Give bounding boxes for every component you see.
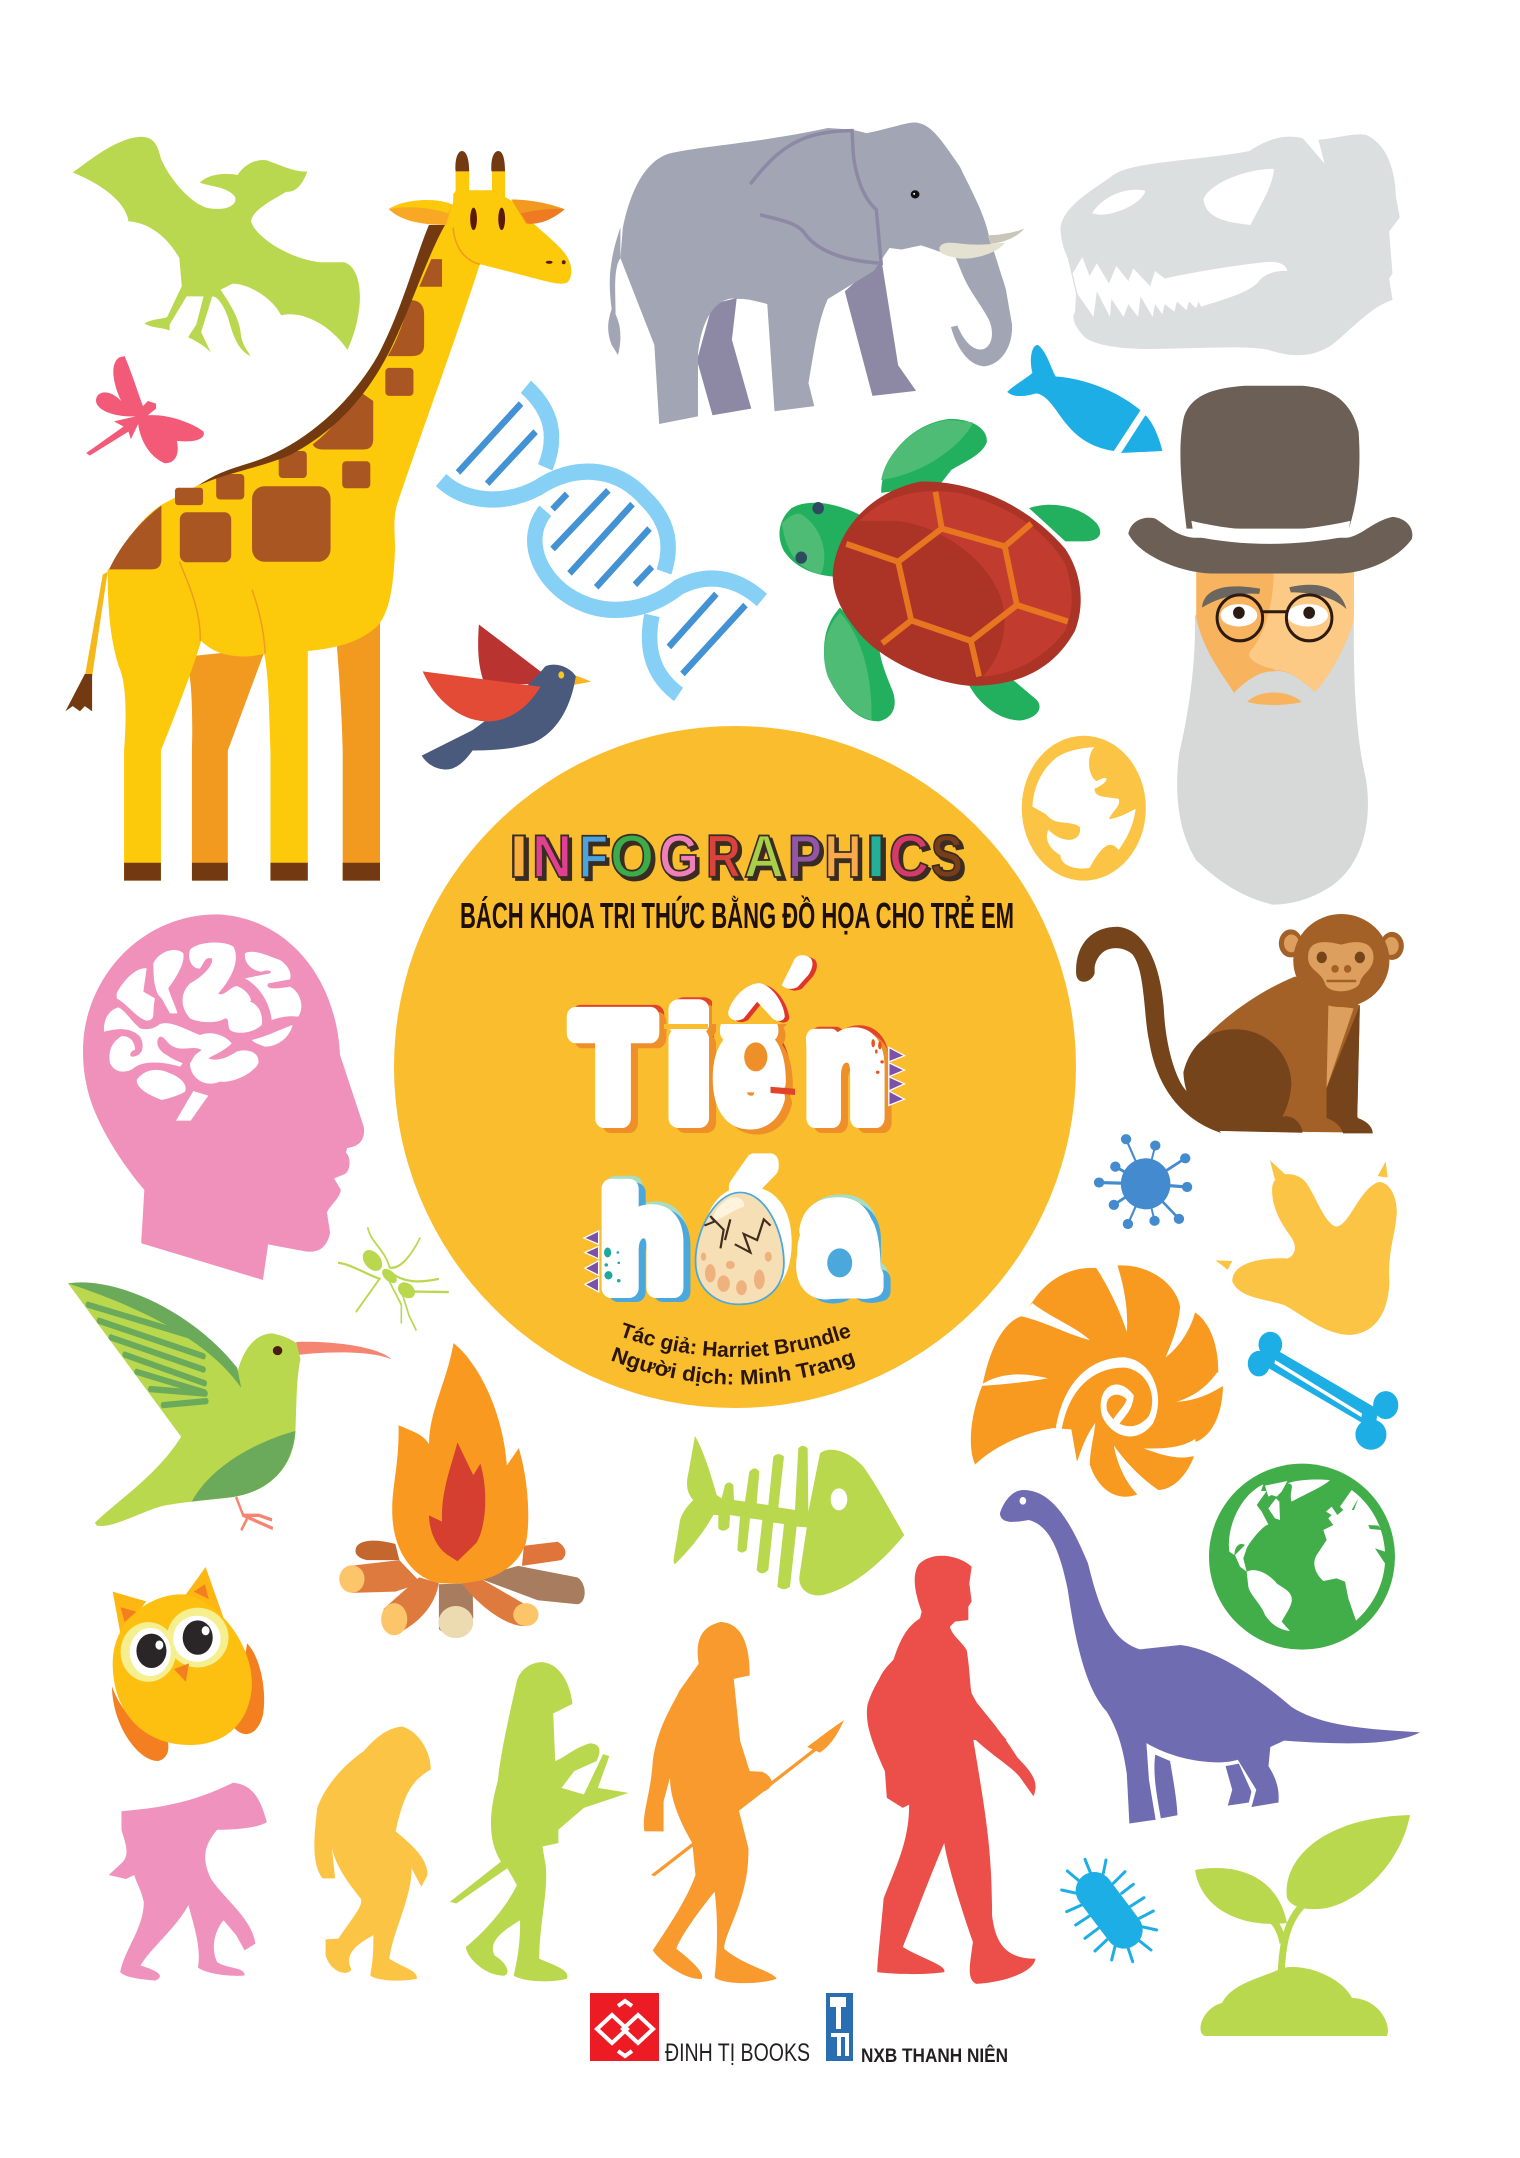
title: Tiến: i [668,982,710,1150]
icon: dinosaur footprint [1216,1160,1397,1335]
heading: INFOGRAPHICS series logo: A [747,826,787,893]
heading: INFOGRAPHICS series logo: I [865,823,887,890]
logo: NXB Thanh Niên: NXB THANH NIÊN [861,2045,1008,2067]
heading: INFOGRAPHICS series logo: C [892,826,932,893]
heading: INFOGRAPHICS series logo: C [889,823,929,890]
heading: INFOGRAPHICS series logo: O [613,826,657,893]
icon: hummingbird [68,1282,391,1530]
icon: brachiosaurus [1000,1490,1420,1824]
title: Tiến: i [675,987,717,1155]
title: hóa: h [609,1169,689,1322]
icon: dinosaur skull [1061,134,1400,355]
icon: blue fish [1007,345,1162,453]
title: Tiến [574,940,891,1155]
heading: INFOGRAPHICS series logo: I [508,823,530,890]
heading: INFOGRAPHICS series logo: O [610,823,654,890]
heading: INFOGRAPHICS series logo [508,823,966,893]
heading: INFOGRAPHICS series logo: F [582,826,611,893]
title: hóa: h [602,1165,682,1318]
icon: fish skeleton [674,1436,904,1595]
title: Tiến: T [581,991,659,1155]
title: Tiến: n [811,980,889,1148]
heading: INFOGRAPHICS series logo: P [791,826,825,893]
text: author and translator: Tác giả: Harriet Brundle [623,1322,850,1357]
icon: yellow planet egg [1022,736,1146,881]
icon: old man with top hat [1128,386,1412,905]
logo: Đinh Tị Books [590,1993,810,2067]
icon: microbe [1062,1859,1157,1962]
icon: virus [1094,1134,1192,1229]
heading: INFOGRAPHICS series logo: G [659,823,699,890]
title: Tiến: ế [716,982,782,1150]
icon: bone [1248,1332,1398,1450]
heading: INFOGRAPHICS series logo: P [788,823,822,890]
icon: turtle [779,419,1100,721]
subtitle: BÁCH KHOA TRI THỨC BẰNG ĐỒ HỌA CHO TRẺ EM [460,894,1014,936]
title: Tiến: T [579,984,657,1148]
icon: campfire [339,1343,585,1638]
text: author and translator: Người dịch: Minh Trang [611,1347,856,1386]
icon: hominid with stick evolution stage 3 [450,1662,629,1981]
icon: pterosaur [73,137,360,356]
heading: INFOGRAPHICS series logo: I [868,826,890,893]
heading: INFOGRAPHICS series logo: A [744,823,784,890]
icon: hominid evolution stage 2 [314,1726,431,1981]
title: hóa: a [808,1156,882,1324]
icon: ape evolution stage 1 [109,1783,267,1981]
logo: NXB Thanh Niên [826,1993,1008,2067]
heading: INFOGRAPHICS series logo: H [827,826,865,893]
panel: central yellow circle [394,726,1076,1408]
icon: modern human evolution stage 5 [867,1556,1036,1984]
icon: DNA helix [441,387,762,694]
title: hóa: a [805,1149,879,1317]
icon: dragonfly [86,356,204,463]
icon: ant [338,1227,449,1330]
icon: bird [422,624,591,770]
heading: INFOGRAPHICS series logo: S [934,826,966,893]
title: Tiến: ế [723,987,789,1155]
title: hóa: h [606,1162,686,1315]
icon: monkey [1076,914,1404,1133]
title: Tiến: i [673,980,715,1148]
heading: INFOGRAPHICS series logo: H [824,823,862,890]
icon: cracked egg and spikes on hóa [584,1192,784,1304]
icon: owl [112,1567,264,1761]
icon: ammonite fossil [971,1264,1225,1497]
text: author and translator [611,1322,856,1386]
heading: INFOGRAPHICS series logo: F [579,823,608,890]
icon: caveman with spear evolution stage 4 [644,1622,844,1983]
heading: INFOGRAPHICS series logo: S [931,823,963,890]
heading: INFOGRAPHICS series logo: G [662,826,702,893]
title: Tiến: n [806,982,884,1150]
title: hóa: ó [706,1135,789,1325]
decoration: spikes and dots on Tiến [871,1039,904,1105]
title: Tiến: n [813,987,891,1155]
heading: INFOGRAPHICS series logo: R [706,823,741,890]
logo: Đinh Tị Books: ĐINH TỊ BOOKS [665,2039,810,2067]
title: hóa: a [801,1152,875,1320]
heading: INFOGRAPHICS series logo: R [709,826,744,893]
title: hóa [602,1135,882,1325]
heading: INFOGRAPHICS series logo: N [535,826,575,893]
title: Tiến: T [574,986,652,1150]
icon: earth globe [1209,1464,1395,1650]
icon: elephant [608,122,1024,424]
heading: INFOGRAPHICS series logo: N [532,823,572,890]
title: Tiến: ế [721,980,787,1148]
icon: sprout plant [1195,1815,1410,2036]
icon: head with brain [83,914,364,1280]
heading: INFOGRAPHICS series logo: I [511,826,533,893]
icon: giraffe [65,151,571,881]
